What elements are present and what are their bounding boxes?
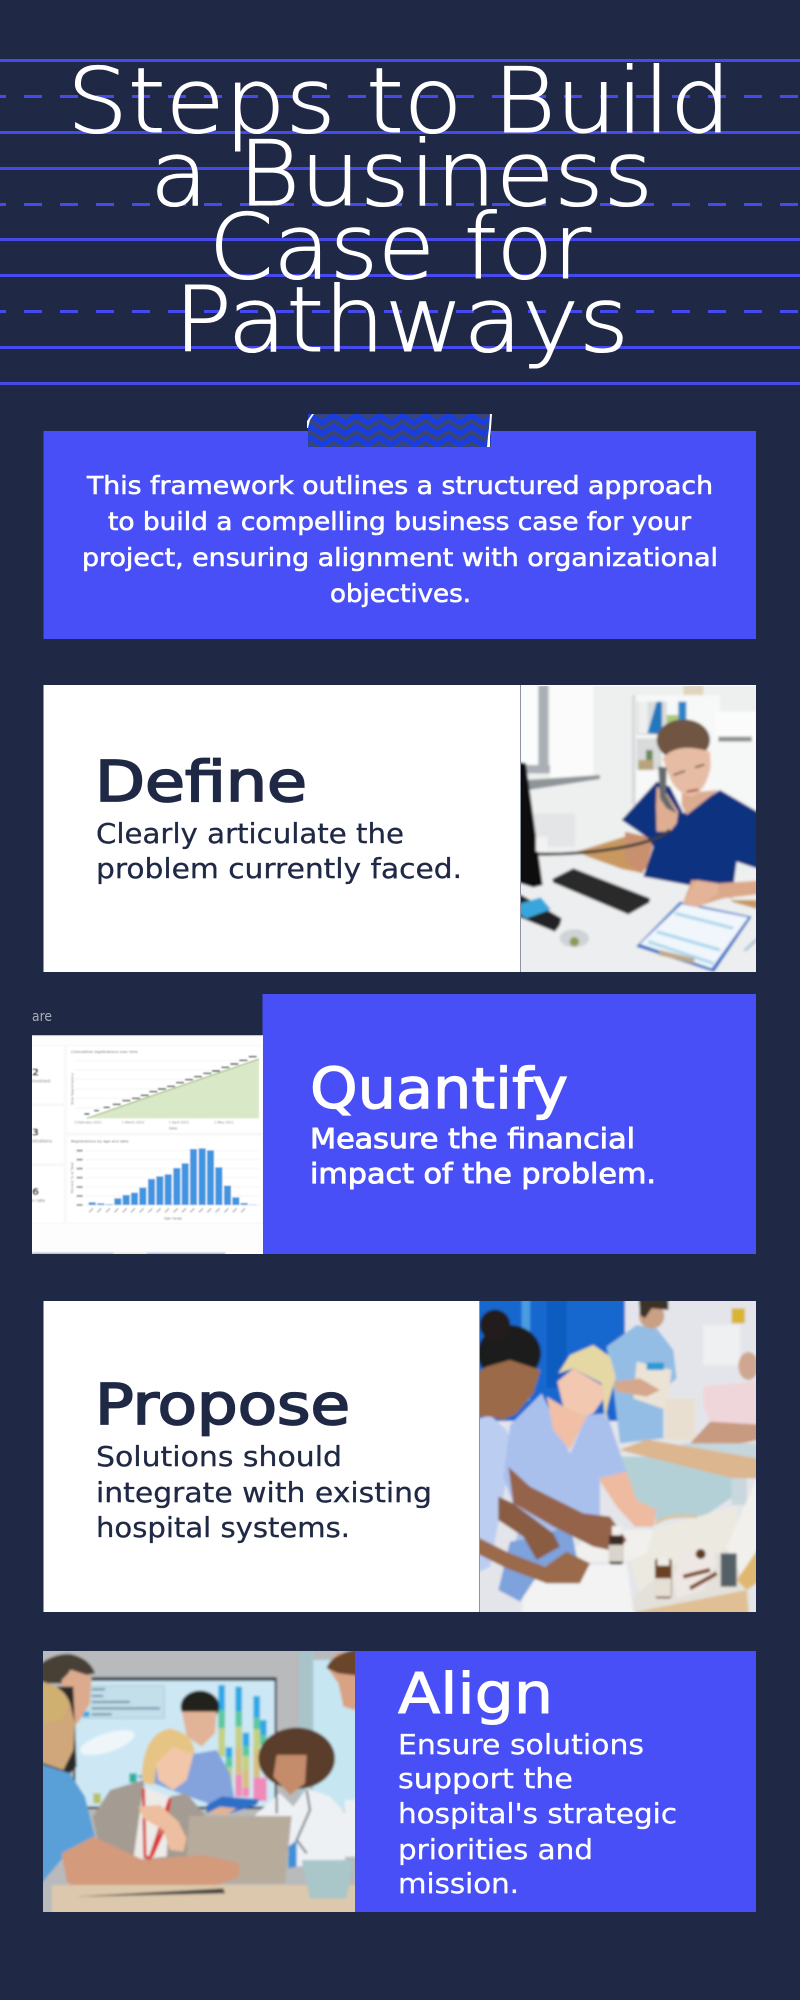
text: Align description xyxy=(398,1728,677,1900)
text: Define description: Clearly articulate the xyxy=(96,817,404,850)
area chart: Cumulative registrations over time xyxy=(71,1049,138,1054)
title: Pathways xyxy=(174,268,629,373)
mug xyxy=(302,1860,353,1898)
stat cards: 2 xyxy=(32,1068,39,1079)
photo divider xyxy=(479,1301,480,1612)
nurse arm left xyxy=(625,832,653,873)
patient xyxy=(704,1382,756,1424)
nurse in background xyxy=(607,1325,677,1443)
area chart: Total Registrations xyxy=(70,1073,74,1106)
text: Propose description xyxy=(96,1440,432,1544)
stat cards: n rate xyxy=(32,1198,45,1204)
bar chart: Registrations by age and date xyxy=(71,1138,129,1143)
washi tape decoration xyxy=(307,414,492,447)
panel: Propose xyxy=(44,1290,767,1623)
panel: intro xyxy=(44,414,756,639)
bed blanket xyxy=(618,1457,733,1520)
photo: nurse on the phone at a desk xyxy=(521,686,756,972)
text: Align description: support the xyxy=(398,1762,573,1795)
monitor xyxy=(521,760,544,889)
neck xyxy=(682,790,718,815)
medicine box xyxy=(632,1508,735,1590)
man at right xyxy=(327,1651,367,1713)
right arm xyxy=(683,880,767,907)
text: Define description xyxy=(96,817,462,885)
area chart: 1 April 2021 xyxy=(169,1120,189,1124)
bar chart xyxy=(70,1140,257,1220)
bars on screen xyxy=(93,1685,267,1803)
text: Align description: hospital's strategic xyxy=(398,1797,677,1830)
intro text: This framework outlines a structured approach xyxy=(86,471,713,500)
hand xyxy=(682,880,718,907)
stat cards: 6 xyxy=(32,1187,39,1198)
panel: Align xyxy=(355,1651,756,1912)
text: Propose description: integrate with existing xyxy=(96,1476,432,1509)
heading: Quantify: Quantify xyxy=(310,1057,568,1122)
man at back left xyxy=(33,1654,95,1683)
laptop xyxy=(185,1816,292,1883)
stat cards xyxy=(32,1068,52,1202)
stat cards: 3 xyxy=(32,1128,39,1139)
paper xyxy=(576,1530,652,1562)
area chart: 3 February 2021 xyxy=(74,1120,102,1124)
bar chart: Percent % of Total xyxy=(70,1162,74,1193)
text: Align description: Ensure solutions xyxy=(398,1728,644,1761)
foreground nurse xyxy=(33,1680,75,1770)
cord xyxy=(538,830,670,854)
intro text xyxy=(82,471,718,608)
title: Steps to Build xyxy=(67,49,731,154)
left nurse xyxy=(480,1414,510,1572)
photo divider xyxy=(520,685,521,972)
heading: Align: Align xyxy=(398,1662,553,1727)
woman with scrubs behind xyxy=(137,1750,234,1807)
desk xyxy=(537,856,756,912)
panel: Quantify xyxy=(262,994,756,1254)
title ruled lines xyxy=(0,59,800,385)
clipboard xyxy=(636,902,752,972)
intro text: objectives. xyxy=(330,579,471,608)
blonde nurse head xyxy=(558,1345,616,1420)
text: Propose description: hospital systems. xyxy=(96,1511,350,1544)
photo: care team around a laptop xyxy=(43,1651,355,1912)
blonde woman xyxy=(93,1780,205,1863)
text: Quantify description xyxy=(310,1122,656,1190)
intro text: project, ensuring alignment with organizational xyxy=(82,543,718,572)
face xyxy=(663,748,711,797)
area chart: Date xyxy=(169,1126,177,1130)
stat cards: istrations xyxy=(32,1138,53,1144)
title: a Business xyxy=(150,122,653,227)
image: dashboard screenshot xyxy=(27,1009,267,1258)
scrubs xyxy=(622,782,767,898)
title: Case for xyxy=(209,195,591,300)
photo: nurses preparing medication xyxy=(480,1301,756,1612)
text: Align description: mission. xyxy=(398,1867,519,1900)
bar chart: Age range xyxy=(164,1216,182,1220)
bottle xyxy=(609,1535,623,1564)
blonde nurse uniform xyxy=(503,1393,627,1550)
title xyxy=(67,49,731,373)
area chart xyxy=(70,1050,260,1130)
keyboard xyxy=(552,868,650,914)
text: Quantify description: Measure the financial xyxy=(310,1122,635,1155)
curly woman xyxy=(258,1728,335,1789)
heading: Propose: Propose xyxy=(95,1373,350,1438)
area chart: 1 May 2021 xyxy=(214,1120,234,1124)
text: Define description: problem currently faced. xyxy=(96,852,462,885)
cup xyxy=(560,929,589,947)
hair xyxy=(657,719,710,761)
screenshot heading fragment: are xyxy=(32,1009,52,1025)
text: Quantify description: impact of the problem. xyxy=(310,1157,656,1190)
panel: Define xyxy=(44,675,767,982)
table xyxy=(52,1885,367,1923)
heading: Define: Define xyxy=(95,750,307,815)
floor xyxy=(577,835,643,873)
table xyxy=(619,1439,767,1478)
area chart: 1 March 2021 xyxy=(122,1120,145,1124)
text: Propose description: Solutions should xyxy=(96,1440,342,1473)
arm over xyxy=(508,1467,627,1552)
phone xyxy=(658,767,677,813)
text: Align description: priorities and xyxy=(398,1833,593,1866)
intro text: to build a compelling business case for your xyxy=(108,507,692,536)
hand raised xyxy=(656,787,678,832)
wall screen xyxy=(73,1677,277,1809)
stat cards: involved xyxy=(32,1078,51,1084)
